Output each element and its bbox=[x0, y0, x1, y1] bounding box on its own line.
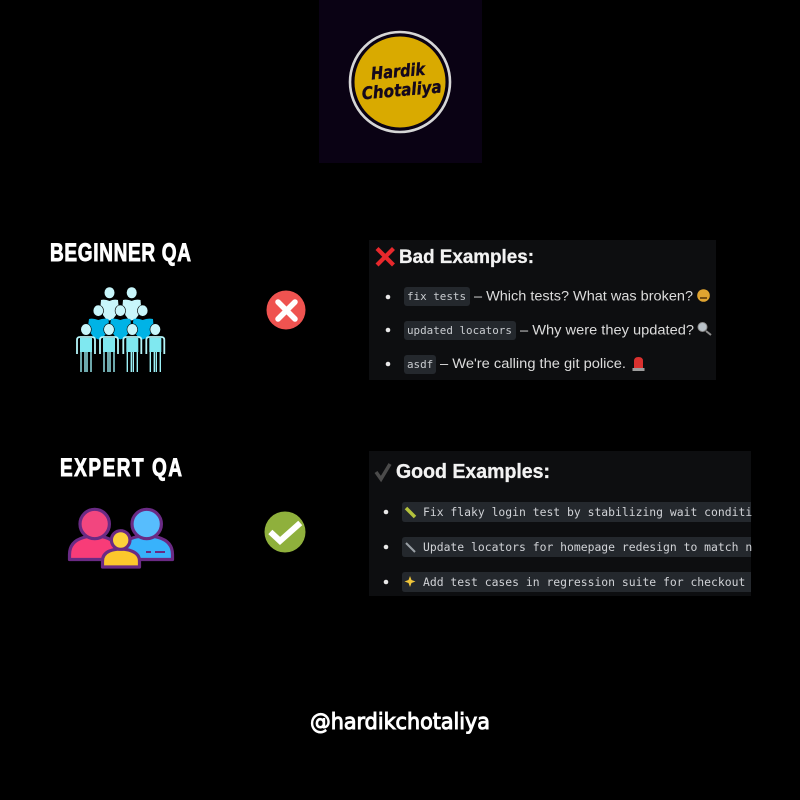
blue person bbox=[120, 509, 172, 560]
icon: green check badge bbox=[264, 512, 306, 552]
good example 2 bbox=[384, 537, 752, 557]
bad example 1: – Which tests? What was broken? bbox=[474, 288, 693, 304]
bad example 3 bbox=[386, 355, 644, 374]
heading: Expert QA: EXPERT QA bbox=[60, 453, 182, 482]
heading: Beginner QA: BEGINNER QA bbox=[50, 238, 191, 267]
icon: red cross badge bbox=[266, 290, 306, 330]
icon: expert team bbox=[70, 509, 172, 567]
handle: @hardikchotaliya bbox=[310, 710, 490, 735]
logo panel bbox=[319, 0, 482, 163]
heading: bad examples: Bad Examples: bbox=[399, 246, 534, 268]
bad example 3: asdf bbox=[407, 358, 433, 371]
icon: gray check bbox=[376, 464, 390, 479]
logo panel: Hardik bbox=[370, 60, 427, 84]
bad example 2 bbox=[386, 321, 711, 340]
back row bbox=[100, 287, 141, 320]
logo panel: Chotaliya bbox=[361, 77, 442, 104]
good example 1 bbox=[384, 502, 752, 522]
bad example 2: – Why were they updated? bbox=[520, 322, 694, 338]
bad example 1 bbox=[386, 287, 710, 306]
good example 1: Fix flaky login test by stabilizing wait conditi bbox=[423, 505, 752, 519]
icon: red X bbox=[378, 250, 392, 264]
yellow person bbox=[102, 531, 140, 567]
good example 3 bbox=[384, 572, 751, 592]
heading: good examples: Good Examples: bbox=[396, 461, 550, 483]
bad example 3: – We're calling the git police. bbox=[440, 356, 626, 371]
middle row bbox=[88, 319, 154, 340]
bad example 1: fix tests bbox=[407, 290, 466, 303]
panel: good examples bbox=[369, 451, 752, 596]
front row bbox=[81, 324, 161, 335]
good example 3: Add test cases in regression suite for checkout bbox=[423, 575, 745, 589]
good example 2: Update locators for homepage redesign to match n bbox=[423, 540, 752, 554]
panel: bad examples bbox=[369, 240, 716, 380]
icon: group of beginners bbox=[77, 287, 164, 372]
bad example 2: updated locators bbox=[407, 324, 512, 337]
pink person bbox=[70, 509, 120, 560]
